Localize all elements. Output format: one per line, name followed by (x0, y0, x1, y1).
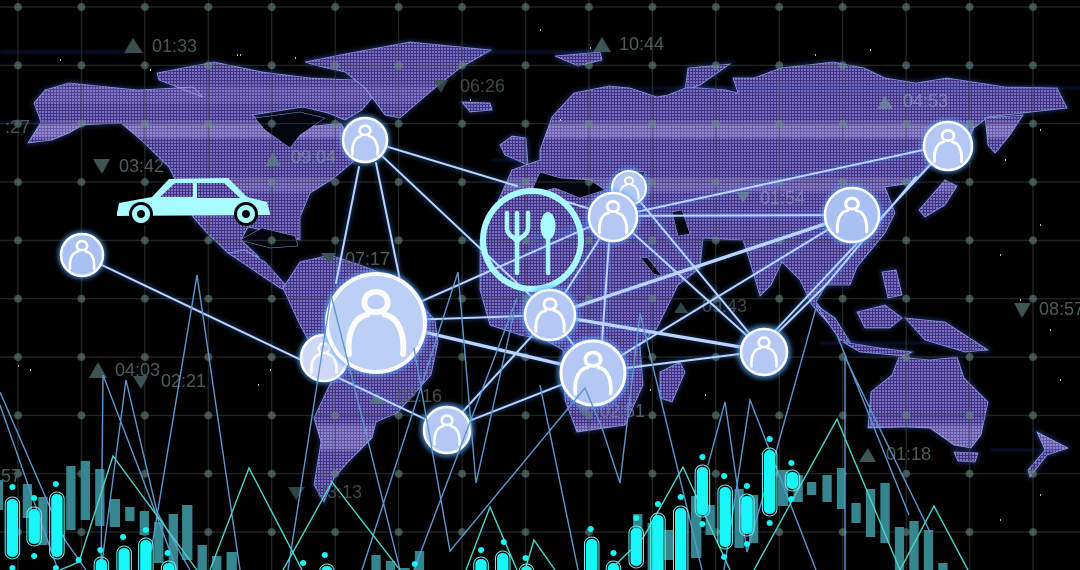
time label 02:21 (133, 371, 206, 391)
node person 12 (737, 325, 791, 379)
node person 10 (557, 337, 629, 409)
time label 02:51 (576, 401, 645, 421)
time label 08:57 (1014, 299, 1080, 319)
time label 02:51: 02:51 (600, 401, 645, 421)
time label 02:21: 02:21 (161, 371, 206, 391)
time label 04:53 (877, 91, 948, 111)
time label 04:53: 04:53 (903, 91, 948, 111)
time label 07:17: 07:17 (345, 249, 390, 269)
time label 01:33: 01:33 (152, 36, 197, 56)
time label 01:54 (736, 188, 805, 208)
teal zigzag lines (60, 419, 968, 570)
time label 03:13: 03:13 (317, 482, 362, 502)
icon: food plate with fork and spoon (483, 191, 581, 289)
time label 09:43 (674, 296, 747, 316)
time label 03:42 (93, 156, 164, 176)
time label 04:03: 04:03 (115, 360, 160, 380)
time label 02:16 (369, 386, 442, 406)
time label 07:17 (321, 249, 390, 269)
time label 01:18: 01:18 (886, 444, 931, 464)
time label 01:54: 01:54 (760, 188, 805, 208)
time label 09:04 (265, 147, 336, 167)
time label 06:26: 06:26 (460, 76, 505, 96)
time label 09:04: 09:04 (291, 147, 336, 167)
link lines (83, 140, 948, 431)
node person 1 (340, 115, 390, 165)
node person 11 (420, 403, 474, 457)
time label 04:03 (89, 360, 160, 380)
node person 4 (822, 185, 882, 245)
icon: car (117, 178, 270, 226)
node person 6 (58, 231, 106, 279)
time label partial 27: :27 (5, 117, 30, 137)
time label 03:42: 03:42 (119, 156, 164, 176)
node person 3 (586, 190, 640, 244)
link glow (83, 140, 948, 431)
node person 7 (298, 332, 350, 384)
cyan candlestick chart (5, 436, 800, 570)
time label 01:33 (124, 36, 197, 56)
time label 06:26 (433, 76, 505, 96)
network nodes (58, 115, 975, 457)
time label 02:16: 02:16 (397, 386, 442, 406)
teal bar chart (0, 461, 948, 570)
time label 01:18 (859, 444, 931, 464)
node person 2 (609, 168, 649, 208)
time label 03:13 (288, 482, 362, 502)
time label 10:44 (593, 34, 664, 54)
node person 5 (921, 119, 975, 173)
thick link lines (377, 215, 852, 372)
network links (83, 140, 948, 431)
node person 9 (521, 286, 579, 344)
time label 09:43: 09:43 (702, 296, 747, 316)
blue zigzag lines (0, 272, 930, 570)
node person 8 large (323, 270, 429, 376)
time label 10:44: 10:44 (619, 34, 664, 54)
